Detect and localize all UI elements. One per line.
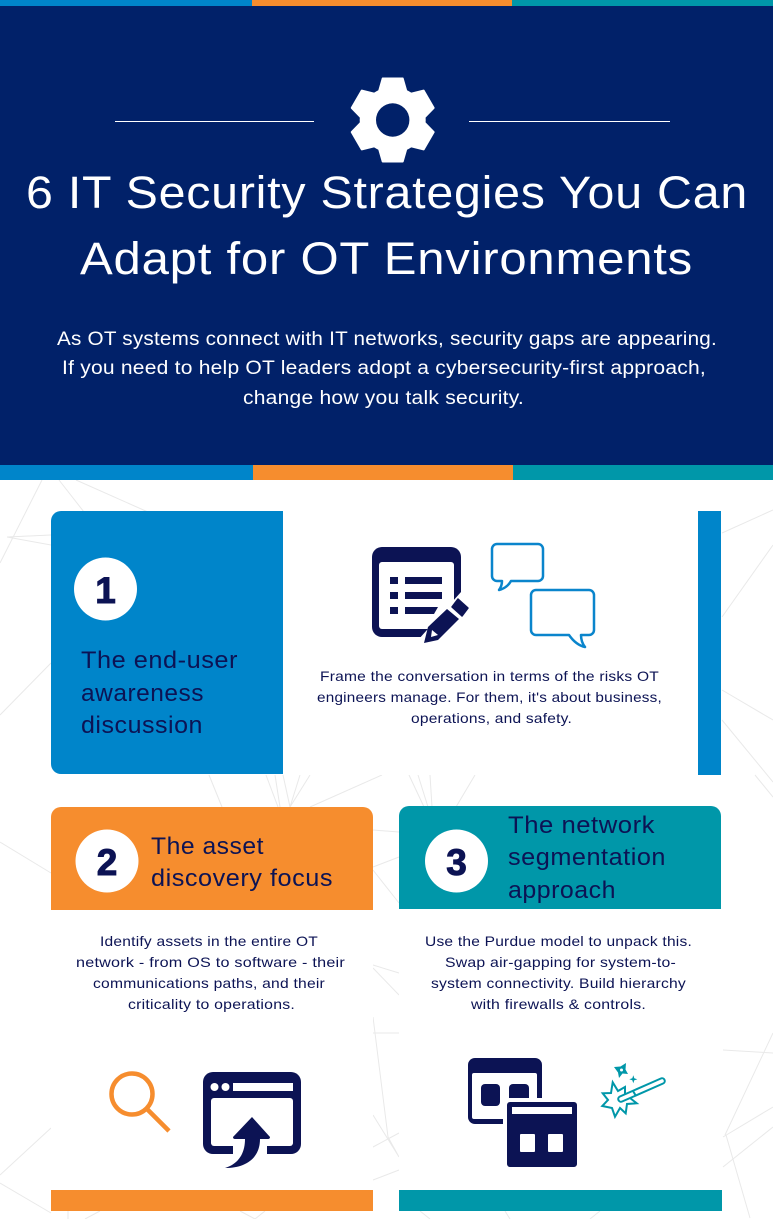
heading: end-user awareness: The end-user bbox=[81, 647, 238, 674]
heading: network segmentation bbox=[508, 812, 666, 904]
heading: network segmentation: The network bbox=[508, 812, 656, 839]
icon: speech bubbles bbox=[492, 544, 594, 647]
panel 1 coloured header bbox=[51, 511, 283, 774]
heading: asset discovery bbox=[151, 833, 333, 892]
text: strategy 2 description bbox=[76, 933, 345, 1012]
text: strategy 1 description: operations, and safety. bbox=[411, 710, 572, 726]
panel: strategy 3 bbox=[399, 806, 722, 1211]
icon: magnifying glass bbox=[112, 1074, 169, 1131]
panel: strategy 2 bbox=[51, 807, 373, 1211]
heading: network segmentation: segmentation bbox=[508, 844, 666, 871]
icon: gear bbox=[349, 78, 436, 162]
panel 2 coloured header bbox=[51, 807, 373, 910]
text: strategy 2 description: criticality to operations. bbox=[128, 996, 295, 1012]
text: strategy 3 description: system connectivity. Build hierarchy bbox=[431, 975, 686, 991]
heading: asset discovery: discovery focus bbox=[151, 865, 333, 892]
text: strategy 3 description: Swap air-gapping for system-to- bbox=[445, 954, 676, 970]
heading: network segmentation: approach bbox=[508, 877, 616, 904]
text: strategy 2 description: Identify assets in the entire OT bbox=[100, 933, 318, 949]
panel: strategy 1 bbox=[51, 511, 721, 775]
number badge 3 bbox=[425, 830, 488, 892]
title bbox=[26, 167, 748, 284]
icon: magic wand bbox=[602, 1063, 662, 1117]
text: strategy 3 description: Use the Purdue model to unpack this. bbox=[425, 933, 692, 949]
text: strategy 2 description: communications paths, and their bbox=[93, 975, 325, 991]
number badge 3: 3 bbox=[446, 842, 467, 883]
text: strategy 2 description: network - from OS to software - their bbox=[76, 954, 345, 970]
icon: application windows bbox=[468, 1058, 577, 1167]
subtitle text: As OT systems connect with IT networks, security gaps are appearing. bbox=[57, 329, 717, 350]
heading: end-user awareness: awareness bbox=[81, 680, 204, 707]
icon: checklist with pencil bbox=[372, 547, 480, 652]
header banner bbox=[0, 0, 773, 480]
panel 3 coloured header bbox=[399, 806, 721, 909]
heading: asset discovery: The asset bbox=[151, 833, 264, 860]
subtitle text: If you need to help OT leaders adopt a cybersecurity-first approach, bbox=[62, 358, 706, 379]
heading: end-user awareness: discussion bbox=[81, 712, 203, 739]
title: 6 IT Security Strategies You Can bbox=[26, 167, 748, 218]
number badge 1: 1 bbox=[95, 570, 116, 611]
number badge 2 bbox=[76, 830, 138, 892]
text: strategy 1 description: engineers manage. For them, it's about business, bbox=[317, 689, 662, 705]
title: Adapt for OT Environments bbox=[80, 233, 693, 284]
panel 2 footer bar bbox=[51, 1190, 373, 1211]
text: strategy 3 description: with firewalls & controls. bbox=[470, 996, 646, 1012]
text: strategy 1 description: Frame the conversation in terms of the risks OT bbox=[320, 668, 659, 684]
number badge 1 bbox=[74, 558, 137, 620]
panel 1 right bar bbox=[698, 511, 721, 775]
text: strategy 3 description bbox=[425, 933, 692, 1012]
icon: browser with upload arrow bbox=[203, 1072, 301, 1168]
subtitle text: change how you talk security. bbox=[243, 388, 524, 409]
panel 3 footer bar bbox=[399, 1190, 722, 1211]
text: strategy 1 description bbox=[317, 668, 662, 726]
number badge 2: 2 bbox=[97, 842, 117, 883]
subtitle text bbox=[57, 329, 717, 409]
heading: end-user awareness bbox=[81, 647, 238, 739]
